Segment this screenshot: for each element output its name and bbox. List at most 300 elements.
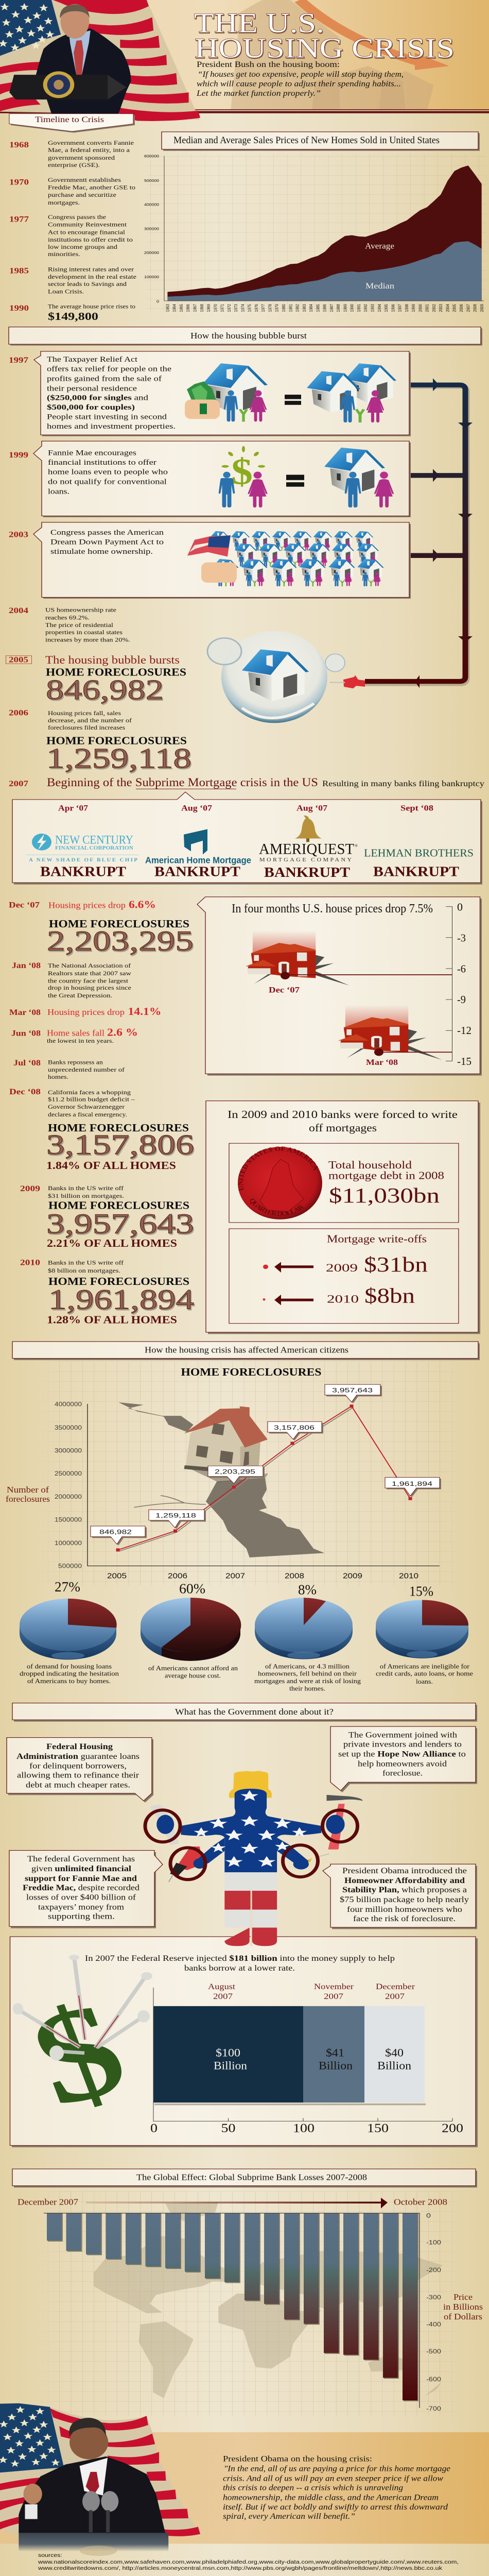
bar labels: Billion <box>377 2059 411 2072</box>
x axis year labels: 1965 <box>179 304 184 312</box>
dates: Apr ‘07 <box>58 804 88 812</box>
foreclosure figures 2008-2010: 1.84% OF ALL HOMES <box>46 1160 176 1172</box>
callout: unlimited financial support: given unlimited financial <box>31 1864 131 1873</box>
logo: Ameriquest: AMERIQUEST <box>259 841 354 857</box>
timeline arrow: October 2008 <box>394 2197 447 2207</box>
x axis years: 2010 <box>399 1572 418 1580</box>
box: total mortgage debt: mortgage debt in 2008 <box>328 1170 444 1181</box>
entry: 2006: Housing prices fall, sales <box>48 710 121 717</box>
sources <box>38 2553 459 2571</box>
timeline entries Dec 07 - Dec 08: Dec ‘08 <box>9 1087 41 1096</box>
timeline entries Dec 07 - Dec 08: Jan ‘08 <box>12 961 41 970</box>
entry: 2007 subprime crisis: 2007 <box>9 779 28 788</box>
x axis year labels: 1992 <box>363 304 368 312</box>
callout: homeowner affordability plan <box>323 1864 477 1929</box>
axis: -9 <box>457 993 466 1006</box>
stacked bar chart <box>150 1981 463 2135</box>
bankrupt labels <box>40 863 459 880</box>
entry: 2006: 2006 <box>9 708 28 717</box>
pie: 27%: dropped indicating the hesitation <box>20 1671 119 1677</box>
foreclosure figures 2008-2010: 2010 <box>20 1258 40 1267</box>
foreclosure figures 2008-2010: Banks in the US write off <box>48 1259 124 1266</box>
axis labels: 100 <box>293 2121 315 2135</box>
x axis year labels: 1995 <box>383 304 389 312</box>
panel: four month price drop chart: In four months U.S. house prices drop 7.5% <box>232 902 433 915</box>
heading: how the crisis affected citizens <box>12 1342 480 1360</box>
x axis year labels: 1975 <box>247 304 252 312</box>
entry: 2005 bubble bursts: The housing bubble bursts <box>45 654 180 667</box>
icon: dollar and couple: $ <box>231 451 253 492</box>
x axis year labels: 1989 <box>343 304 348 312</box>
chart: median and average sales prices: Average <box>365 241 394 250</box>
x axis year labels: 2002 <box>431 304 436 312</box>
timeline entries Dec 07 - Dec 08: the lowest in ten years. <box>47 1037 114 1044</box>
entry: 2005 bubble bursts: 846,982 <box>46 674 164 705</box>
entry: 2004: properties in coastal states <box>45 629 123 636</box>
timeline entries Dec 07 - Dec 08: drop in housing prices since <box>48 985 131 991</box>
icon: equals <box>285 395 301 405</box>
y axis labels: 3000000 <box>55 1447 82 1454</box>
timeline entries 1968-1990: minorities. <box>48 250 80 258</box>
panel: 2003 american dream: Dream Down Payment Act to <box>50 538 164 546</box>
band: Obama quote: crisis. And all of us will pay an even steeper price if we allow <box>223 2473 443 2483</box>
timeline entries 1968-1990: 1977 <box>9 214 29 224</box>
chart: median and average sales prices <box>144 154 486 312</box>
banner: timeline to crisis: Timeline to Crisis <box>35 114 104 124</box>
x axis year labels: 2001 <box>425 304 430 312</box>
icon: dollar with syringes: $ <box>14 1974 144 2135</box>
logo: New Century: NEW CENTURY <box>55 834 133 846</box>
panel: 1999 fannie mae: Fannie Mae encourages <box>48 449 136 457</box>
x axis years: 2008 <box>285 1572 304 1580</box>
heading: global effect <box>12 2169 477 2188</box>
chart title box <box>162 132 480 151</box>
timeline entries 1968-1990: sector leads to Savings and <box>48 280 127 287</box>
panel: 1999 fannie mae: loans. <box>48 487 69 496</box>
y axis labels: 0 <box>156 299 159 303</box>
chart title box: Median and Average Sales Prices of New Homes Sold in United States <box>173 135 440 146</box>
x axis year labels: 1973 <box>234 304 238 312</box>
title <box>194 8 455 64</box>
x axis year labels: 1963 <box>165 304 170 312</box>
sources: www.nationalscoreindex.com,www.safehaven.com,www.philadelphiafed.org,www.city-data.com,www.globalpropertyguide.com/,www.reuters.com, <box>38 2560 459 2565</box>
callouts: 3,157,806 <box>274 1424 315 1431</box>
x axis year labels: 2008 <box>473 304 478 312</box>
box: total mortgage debt: $11,030bn <box>329 1183 440 1207</box>
timeline entries 1968-1990 <box>9 139 136 323</box>
chart: global subprime bank losses <box>18 2191 483 2416</box>
timeline entries 1968-1990: Freddie Mac, another GSE to <box>48 184 136 191</box>
logo: New Century: A NEW SHADE OF BLUE CHIP <box>29 858 137 863</box>
y axis labels: 1500000 <box>55 1516 82 1523</box>
foreclosure figures 2008-2010 <box>20 1122 194 1326</box>
timeline entries Dec 07 - Dec 08: 6.6% <box>129 899 156 910</box>
timeline entries Dec 07 - Dec 08: the country face the largest <box>48 977 129 984</box>
timeline entries Dec 07 - Dec 08: Governor Schwarzenegger <box>48 1104 125 1110</box>
pie: 27%: of Americans to buy homes. <box>27 1678 111 1685</box>
x axis year labels: 1970 <box>213 304 218 312</box>
band: Obama quote: spiral, every American will benefit.” <box>223 2511 355 2521</box>
x axis year labels: 1981 <box>288 304 293 312</box>
callouts: 2,203,295 <box>215 1468 255 1475</box>
heading: global effect: The Global Effect: Global Subprime Bank Losses 2007-2008 <box>136 2173 367 2182</box>
axis: -15 <box>457 1056 471 1068</box>
foreclosure figures 2008-2010: 2.21% OF ALL HOMES <box>47 1238 177 1249</box>
callouts: 3,957,643 <box>332 1387 373 1394</box>
pie: 60% <box>141 1581 241 1680</box>
timeline arrow: December 2007 <box>18 2197 78 2207</box>
flag: top <box>0 0 200 121</box>
quote: President Bush: “If houses get too expensive, people will stop buying them, <box>198 69 404 79</box>
callouts: 846,982 <box>99 1528 132 1535</box>
pie: 8% <box>254 1582 361 1692</box>
band: Obama quote: President Obama on the housing crisis: <box>223 2454 372 2463</box>
y axis title: of Dollars <box>444 2312 482 2321</box>
panel: 1997 taxpayer relief act: 1997 <box>9 355 28 364</box>
quote: President Bush: which will cause people to adjust their spending habits... <box>197 79 401 88</box>
y axis labels: 600000 <box>144 154 159 159</box>
y axis labels <box>144 154 159 303</box>
callout: homeowner affordability plan: four million homeowners who <box>347 1905 462 1914</box>
timeline entries 1968-1990: enterprise (GSE). <box>48 161 100 168</box>
x axis year labels: 1999 <box>411 304 416 312</box>
callout: homeowner affordability plan: $75 billion package to help nearly <box>340 1895 469 1904</box>
rings around hands <box>145 1810 357 1879</box>
bankrupt labels: BANKRUPT <box>373 863 459 879</box>
y axis title: Price <box>453 2292 473 2302</box>
y axis labels: 100000 <box>144 275 159 279</box>
callout: homeowner affordability plan: Stability Plan, which proposes a <box>342 1885 467 1894</box>
x axis years: 2005 <box>107 1572 127 1580</box>
y axis title <box>443 2292 483 2321</box>
timeline entries 1968-1990: Congress passes the <box>48 213 106 221</box>
panel: 1997 taxpayer relief act: profits gained from the sale of <box>47 375 162 383</box>
panel: bankruptcies <box>12 792 482 885</box>
timeline entries 1968-1990: Community Reinvestment <box>48 221 127 228</box>
banner: timeline to crisis <box>9 114 135 133</box>
y axis labels: -100 <box>426 2239 441 2246</box>
pie: 27%: 27% <box>55 1579 80 1595</box>
y axis labels <box>426 2212 441 2412</box>
box: mortgage write-offs: $8bn <box>364 1283 415 1308</box>
band: Obama quote: "In the end, all of us are paying a price for this home mortgage <box>224 2464 450 2473</box>
timeline entries Dec 07 - Dec 08: 2.6 % <box>107 1026 138 1038</box>
callout: unlimited financial support <box>9 1851 163 1928</box>
panel: federal reserve injection <box>10 1937 478 2147</box>
entry: 2005 bubble bursts: HOME FORECLOSURES <box>46 666 186 679</box>
callout: hope now alliance: help homeowners avoid <box>358 1759 447 1768</box>
pie: 27%: of demand for housing loans <box>27 1663 112 1670</box>
dates: Aug ‘07 <box>296 804 327 812</box>
timeline entries 1968-1990: development in the real estate <box>48 273 136 280</box>
icon: equals <box>286 475 304 487</box>
y axis labels: -300 <box>426 2294 441 2301</box>
bankrupt labels: BANKRUPT <box>154 863 240 879</box>
callouts: 1,961,894 <box>392 1480 432 1487</box>
month labels <box>208 1981 415 2001</box>
timeline entries Dec 07 - Dec 08: $11.2 billion budget deficit – <box>48 1096 135 1103</box>
foreclosure figures 2008-2010: $8 billion on mortgages. <box>48 1267 120 1274</box>
callout: federal housing administration: allowing them to refinance their <box>17 1771 139 1780</box>
x axis year labels: 2004 <box>445 304 450 312</box>
timeline entries 1968-1990: $149,800 <box>48 310 98 323</box>
pie: 15%: 15% <box>409 1584 433 1599</box>
icon: house in bubble with pin <box>207 631 365 723</box>
marker: Dec 07 house: Dec ‘07 <box>269 985 300 994</box>
box: total mortgage debt <box>229 1143 459 1223</box>
heading: how the housing bubble burst <box>9 327 482 346</box>
foreclosure figures 2008-2010: HOME FORECLOSURES <box>48 1199 189 1212</box>
band: Obama quote: this crisis to deepen -- a crisis which is unraveling <box>223 2483 403 2492</box>
panel: 2003 american dream: 2003 <box>9 530 28 539</box>
y axis labels: -600 <box>426 2376 441 2383</box>
logo: New Century: FINANCIAL CORPORATION <box>55 845 133 851</box>
panel: 1997 taxpayer relief act: The Taxpayer Relief Act <box>47 355 138 364</box>
axis <box>446 901 471 1068</box>
timeline entries Dec 07 - Dec 08: Dec ‘07 <box>9 901 40 909</box>
timeline entries Dec 07 - Dec 08: The National Association of <box>48 962 131 969</box>
x axis year labels: 1997 <box>397 304 403 312</box>
callouts: 1,259,118 <box>155 1512 196 1519</box>
panel: 1999 fannie mae <box>9 441 411 517</box>
pie: 60%: 60% <box>179 1581 205 1597</box>
month labels: August <box>208 1981 235 1991</box>
y axis labels: 500000 <box>58 1563 82 1569</box>
header banner <box>0 0 489 113</box>
y axis labels: 2500000 <box>55 1470 82 1477</box>
axis: -12 <box>457 1025 471 1037</box>
x axis year labels: 1968 <box>199 304 204 312</box>
month labels: 2007 <box>324 1991 343 2001</box>
x axis years: 2007 <box>225 1572 245 1580</box>
panel: 1997 taxpayer relief act: ($250,000 for singles and <box>47 394 148 402</box>
x axis year labels: 1982 <box>295 304 300 312</box>
x axis year labels: 1986 <box>322 304 327 312</box>
bankrupt labels: BANKRUPT <box>40 863 126 879</box>
pie: 60%: of Americans cannot afford an <box>148 1665 238 1672</box>
x axis year labels: 1983 <box>302 304 307 312</box>
timeline entries 1968-1990: Loan Crisis. <box>48 287 84 295</box>
quote: President Bush: President Bush on the housing boom: <box>197 59 340 69</box>
callout: federal housing administration <box>7 1738 153 1803</box>
sources: www.creditwritedowns.com/, http://articles.moneycentral.msn.com,http://www.pbs.org/wgbh/pages/frontline/meltdown/,http://news.bbc.co.uk <box>38 2566 442 2571</box>
panel: 1999 fannie mae: home loans even to people who <box>48 468 168 476</box>
panel: 1997 taxpayer relief act: People start investing in second <box>47 413 167 421</box>
panel: 1999 fannie mae: financial institutions to offer <box>48 459 157 467</box>
bar labels <box>214 2046 411 2072</box>
x axis year labels: 2009 <box>479 304 484 312</box>
x axis year labels: 2007 <box>466 304 470 312</box>
quote: President Bush <box>196 59 404 98</box>
timeline entries 1968-1990: purchase and securitize <box>48 191 116 198</box>
logo: American Home Mortgage <box>145 829 251 865</box>
timeline entries Dec 07 - Dec 08: Home sales fall <box>47 1028 104 1038</box>
month labels: 2007 <box>385 1991 405 2001</box>
timeline entries Dec 07 - Dec 08: Jul ‘08 <box>13 1058 41 1067</box>
panel: write-off mortgages <box>205 1100 480 1334</box>
x axis year labels: 1991 <box>356 304 361 312</box>
portrait: President Bush at podium <box>9 4 131 114</box>
band: Obama quote: homeownership, the middle class, and the American Dream <box>223 2493 439 2502</box>
chart: median and average sales prices: Median <box>365 281 394 291</box>
box: total mortgage debt: Total household <box>328 1159 412 1171</box>
timeline entries Dec 07 - Dec 08: Realtors state that 2007 saw <box>48 970 132 977</box>
panel: 2003 american dream <box>9 522 411 599</box>
timeline entries 1968-1990: Government converts Fannie <box>48 139 134 146</box>
y axis labels: 1000000 <box>55 1539 82 1547</box>
entry: 2004: 2004 <box>9 606 29 615</box>
panel: 1997 taxpayer relief act: offers tax relief for people on the <box>47 365 171 373</box>
box: mortgage write-offs: $31bn <box>364 1252 428 1276</box>
pie: 15% <box>376 1584 473 1685</box>
connector pipe <box>365 378 473 688</box>
y axis labels: 3500000 <box>55 1424 82 1431</box>
icon: house and couple <box>324 448 394 507</box>
timeline entries Dec 07 - Dec 08: Housing prices drop <box>47 1007 125 1018</box>
axis labels: 50 <box>221 2121 235 2135</box>
timeline entries 1968-1990: institutions to offer credit to <box>48 236 133 243</box>
entry: 2006 <box>9 708 191 774</box>
x axis year labels: 1996 <box>391 304 395 312</box>
timeline entries Dec 07 - Dec 08: California faces a whopping <box>48 1089 131 1096</box>
callout: hope now alliance <box>330 1726 477 1792</box>
y axis labels: 300000 <box>144 226 159 231</box>
x axis year labels: 1987 <box>329 304 334 312</box>
bar shadows <box>48 2213 418 2401</box>
foreclosure figures 2008-2010: HOME FORECLOSURES <box>48 1276 189 1288</box>
foreclosure figures 2008-2010: 3,957,643 <box>46 1208 194 1239</box>
callout: hope now alliance: private investors and lenders to <box>343 1740 462 1749</box>
pie: 15%: loans. <box>416 1679 433 1685</box>
faded houses and falling arrow <box>231 0 449 110</box>
entry: 2006: decrease, and the number of <box>48 717 132 724</box>
pie: 8%: of Americans, or 4.3 million <box>265 1663 350 1670</box>
world map <box>94 2202 443 2398</box>
pie: 15%: of Americans are ineligible for <box>380 1663 469 1670</box>
pie: 8%: 8% <box>298 1582 317 1598</box>
marker: Mar 08 house: Mar ‘08 <box>366 1058 398 1067</box>
foreclosure figures 2008-2010: Banks in the US write off <box>48 1185 124 1192</box>
timeline entries Dec 07 - Dec 08: homes. <box>48 1074 68 1080</box>
timeline entries 1968-1990: 1968 <box>9 140 29 149</box>
y axis title: in Billions <box>443 2302 483 2312</box>
x axis year labels: 1988 <box>336 304 341 312</box>
y axis labels: -700 <box>426 2405 441 2412</box>
callout: homeowner affordability plan: President Obama introduced the <box>342 1866 467 1875</box>
entry: 2004 <box>9 606 130 643</box>
marker: Mar 08 house <box>317 1005 452 1067</box>
callout: hope now alliance: The Government joined with <box>348 1731 458 1739</box>
logo: New Century <box>26 834 139 863</box>
x axis year labels: 1984 <box>309 304 313 312</box>
x axis year labels: 2003 <box>439 304 443 312</box>
pie: 27% <box>20 1579 119 1685</box>
timeline entries 1968-1990: Rising interest rates and over <box>48 265 134 273</box>
logo: Ameriquest: ® <box>355 843 358 848</box>
y axis labels: 4000000 <box>55 1400 82 1408</box>
bar labels: Billion <box>319 2059 353 2072</box>
timeline arrow <box>18 2197 447 2208</box>
logo: Ameriquest <box>259 816 358 863</box>
x axis year labels: 1966 <box>186 304 190 312</box>
panel: four month price drop chart <box>197 897 482 1076</box>
panel: federal reserve injection: In 2007 the Federal Reserve injected $181 billion into the money supply to help <box>85 1954 395 1963</box>
axis labels <box>150 2121 463 2135</box>
heading: what has the government done <box>12 1703 477 1722</box>
foreclosure figures 2008-2010: HOME FORECLOSURES <box>48 1122 189 1134</box>
timeline entries Dec 07 - Dec 08: Jun ‘08 <box>11 1029 41 1038</box>
axis labels: 0 <box>150 2121 158 2135</box>
axis: 0 <box>457 901 463 913</box>
foreclosure figures 2008-2010: 3,157,806 <box>46 1129 194 1160</box>
timeline entries Dec 07 - Dec 08: unprecedented number of <box>48 1066 125 1073</box>
y axis labels: -500 <box>426 2348 441 2355</box>
x axis year labels: 1971 <box>220 304 225 312</box>
flag: bottom <box>0 2403 200 2536</box>
band: Obama quote <box>0 2432 489 2544</box>
y axis labels: 0 <box>426 2212 431 2219</box>
box: total mortgage debt: QUARTER DOLLAR <box>250 1198 304 1216</box>
y axis title: Number of <box>7 1485 49 1495</box>
timeline entries 1968-1990: Act to encourage financial <box>48 228 125 235</box>
pie: 8%: their homes. <box>289 1685 325 1692</box>
callout: hope now alliance: foreclosue. <box>382 1769 423 1777</box>
y axis labels: -400 <box>426 2321 441 2328</box>
panel: write-off mortgages: In 2009 and 2010 banks were forced to write <box>228 1109 458 1121</box>
callout: unlimited financial support: taxpayers’ money from <box>38 1903 124 1911</box>
timeline entries Dec 07 - Dec 08: Banks repossess an <box>48 1059 103 1065</box>
y axis labels: 2000000 <box>55 1493 82 1500</box>
timeline entries 1968-1990: The average house price rises to <box>48 303 135 310</box>
pie: 15%: credit cards, auto loans, or home <box>376 1671 473 1677</box>
entry: 2007 subprime crisis <box>9 776 484 789</box>
timeline entries 1968-1990: 1985 <box>9 266 29 275</box>
callout: unlimited financial support: Freddie Mac, despite recorded <box>23 1883 140 1892</box>
x axis year labels: 1985 <box>316 304 320 312</box>
y axis labels: -200 <box>426 2266 441 2274</box>
timeline entries 1968-1990: Mae, a federal entity, into a <box>48 146 130 154</box>
callout: homeowner affordability plan: Homeowner Affordability and <box>344 1876 465 1885</box>
x axis year labels: 1979 <box>274 304 280 312</box>
panel: 1997 taxpayer relief act: homes and investment properties. <box>47 422 176 431</box>
timeline entries Dec 07 - Dec 08: Housing prices drop <box>48 901 126 910</box>
x axis year labels: 1994 <box>377 304 382 312</box>
bankrupt labels: BANKRUPT <box>264 865 350 880</box>
logo: Lehman Brothers: LEHMAN BROTHERS <box>364 847 474 859</box>
entry: 2006: HOME FORECLOSURES <box>46 735 187 747</box>
x axis year labels: 1969 <box>206 304 211 312</box>
logo: Ameriquest: MORTGAGE COMPANY <box>259 857 352 863</box>
x axis year labels: 1977 <box>261 304 266 312</box>
axes <box>88 1404 440 1566</box>
callout: federal housing administration: debt at much cheaper rates. <box>26 1781 130 1789</box>
pie: 8%: mortgages and were at risk of losing <box>254 1678 361 1685</box>
bars <box>47 2213 417 2400</box>
icon: dollar and couple <box>219 446 268 507</box>
callout: federal housing administration: Administration guarantee loans <box>16 1752 139 1760</box>
pie: 60%: average house cost. <box>165 1672 221 1680</box>
axis labels: 200 <box>442 2121 463 2135</box>
x axis year labels: 1976 <box>254 304 259 312</box>
y axis labels: 400000 <box>144 202 159 207</box>
box: mortgage write-offs: 2010 <box>327 1293 359 1306</box>
sources: sources: <box>38 2553 62 2558</box>
callout: unlimited financial support: support for Fannie Mae and <box>25 1874 137 1883</box>
axis: -3 <box>457 932 466 944</box>
x axis year labels: 2000 <box>418 304 423 312</box>
illustration: cracked ground and tilting house <box>118 1402 324 1557</box>
entry: 2005 bubble bursts <box>6 654 186 705</box>
